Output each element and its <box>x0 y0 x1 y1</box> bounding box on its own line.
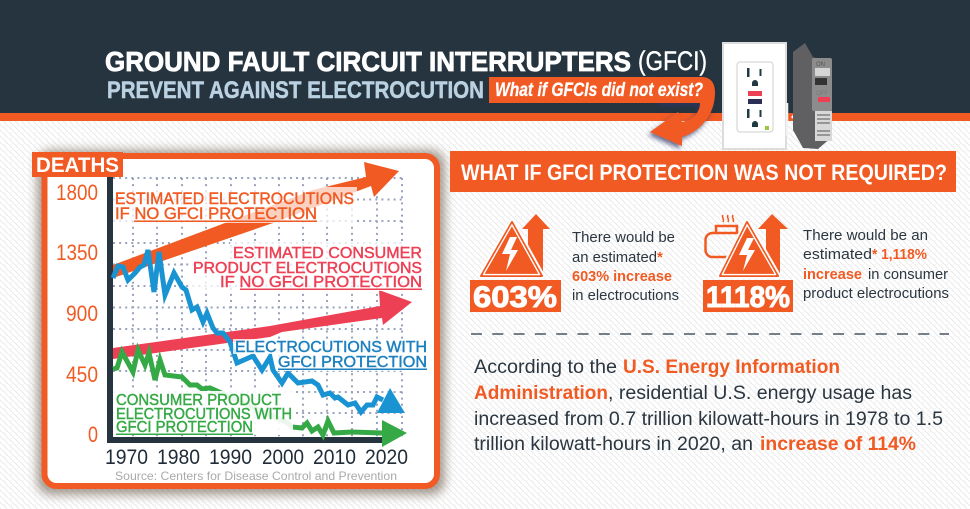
text block: energy usage paragraph: increase of 114% <box>760 434 916 455</box>
stat text: estimated <box>803 246 872 263</box>
icon: circuit breaker: ON <box>816 62 825 68</box>
header band <box>0 0 970 121</box>
icon: circuit breaker: OFF <box>816 91 828 97</box>
y axis labels <box>56 180 98 447</box>
x axis labels: 2020 <box>365 446 408 469</box>
y axis labels: 1350 <box>56 240 98 265</box>
value box: 603% <box>473 281 557 314</box>
stat text: product electrocutions <box>803 285 949 302</box>
stat text <box>572 229 679 304</box>
text block: energy usage paragraph: , residential U.S. energy usage has <box>608 383 912 404</box>
axes <box>110 177 383 440</box>
stat text: increase <box>803 266 862 283</box>
title <box>105 46 707 104</box>
grid lines <box>113 178 402 437</box>
label: consumer product electrocutions with GFCI: ELECTROCUTIONS WITH <box>116 406 292 423</box>
stat text <box>803 227 949 302</box>
text block: energy usage paragraph: U.S. Energy Information <box>623 357 840 378</box>
stat text: in electrocutions <box>572 287 679 304</box>
stat text: an estimated <box>572 249 657 266</box>
x axis labels: 1990 <box>209 446 252 469</box>
label: electrocutions with GFCI <box>233 339 429 371</box>
line: electrocutions with GFCI <box>113 250 405 413</box>
stat text: There would be <box>572 229 675 246</box>
text block: energy usage paragraph <box>474 357 943 455</box>
label: consumer product electrocutions with GFCI <box>113 391 293 436</box>
text block: energy usage paragraph: Administration <box>474 383 608 404</box>
label: electrocutions with GFCI: GFCI PROTECTION <box>278 354 427 371</box>
title: (GFCI) <box>638 46 707 76</box>
label: estimated electrocutions: IF NO GFCI PROTECTION <box>115 204 317 223</box>
label: estimated consumer product electrocutions: PRODUCT ELECTROCUTIONS <box>193 260 422 277</box>
callout arrow: what if GFCIs did not exist <box>489 77 715 149</box>
x axis labels: 2010 <box>313 446 356 469</box>
x axis labels: 1980 <box>157 446 200 469</box>
text block: energy usage paragraph: According to the <box>474 357 617 378</box>
stat: 1118% <box>703 214 949 314</box>
stat: 603% <box>470 214 679 314</box>
title: PREVENT AGAINST ELECTROCUTION <box>107 77 484 104</box>
value box: 1118% <box>706 281 790 314</box>
y axis labels: 450 <box>66 362 98 387</box>
x axis labels <box>105 446 408 469</box>
y axis labels: 900 <box>66 301 98 326</box>
label: estimated consumer product electrocutions <box>190 241 425 291</box>
y axis labels: 0 <box>88 422 98 447</box>
panel: deaths chart <box>32 150 445 495</box>
icon: warning triangle with up arrow <box>481 214 550 276</box>
label: electrocutions with GFCI: ELECTROCUTIONS WITH <box>235 339 427 356</box>
label: estimated consumer product electrocutions: IF NO GFCI PROTECTION <box>220 274 422 291</box>
icon: circuit breaker <box>793 43 832 149</box>
title: GROUND FAULT CIRCUIT INTERRUPTERS <box>105 46 631 77</box>
icon: GFCI outlet <box>723 43 803 149</box>
x axis labels: 2000 <box>262 446 304 469</box>
text block: energy usage paragraph: trillion kilowatt-hours in 2020, an <box>474 434 753 455</box>
label: estimated electrocutions <box>113 187 357 223</box>
stat text: 603% increase <box>572 268 672 285</box>
source note: Source: Centers for Disease Control and Prevention <box>115 469 397 483</box>
stat text: in consumer <box>868 266 948 283</box>
x axis labels: 1970 <box>105 446 148 469</box>
label: estimated consumer product electrocutions: ESTIMATED CONSUMER <box>233 245 422 262</box>
callout arrow: what if GFCIs did not exist: What if GFCIs did not exist? <box>495 80 703 101</box>
deaths tag: DEATHS <box>36 154 119 177</box>
label: consumer product electrocutions with GFCI: CONSUMER PRODUCT <box>116 392 281 409</box>
line: consumer product electrocutions with GFCI <box>113 350 407 447</box>
y axis labels: 1800 <box>56 180 98 205</box>
stat text: There would be an <box>803 227 928 244</box>
arrow: estimated electrocutions without GFCI <box>113 162 399 278</box>
label: consumer product electrocutions with GFCI: GFCI PROTECTION <box>116 419 253 436</box>
heading: what if GFCI protection was not required <box>450 151 956 192</box>
stat text: * 1,118% <box>872 246 927 263</box>
label: estimated electrocutions: ESTIMATED ELECTROCUTIONS <box>115 189 354 208</box>
arrow: estimated consumer product electrocutions without GFCI <box>113 290 412 359</box>
icon: toaster with warning triangle and up arrow <box>706 214 788 276</box>
stat text: * <box>657 249 663 266</box>
text block: energy usage paragraph: increased from 0.7 trillion kilowatt-hours in 1978 to 1.5 <box>474 409 943 430</box>
